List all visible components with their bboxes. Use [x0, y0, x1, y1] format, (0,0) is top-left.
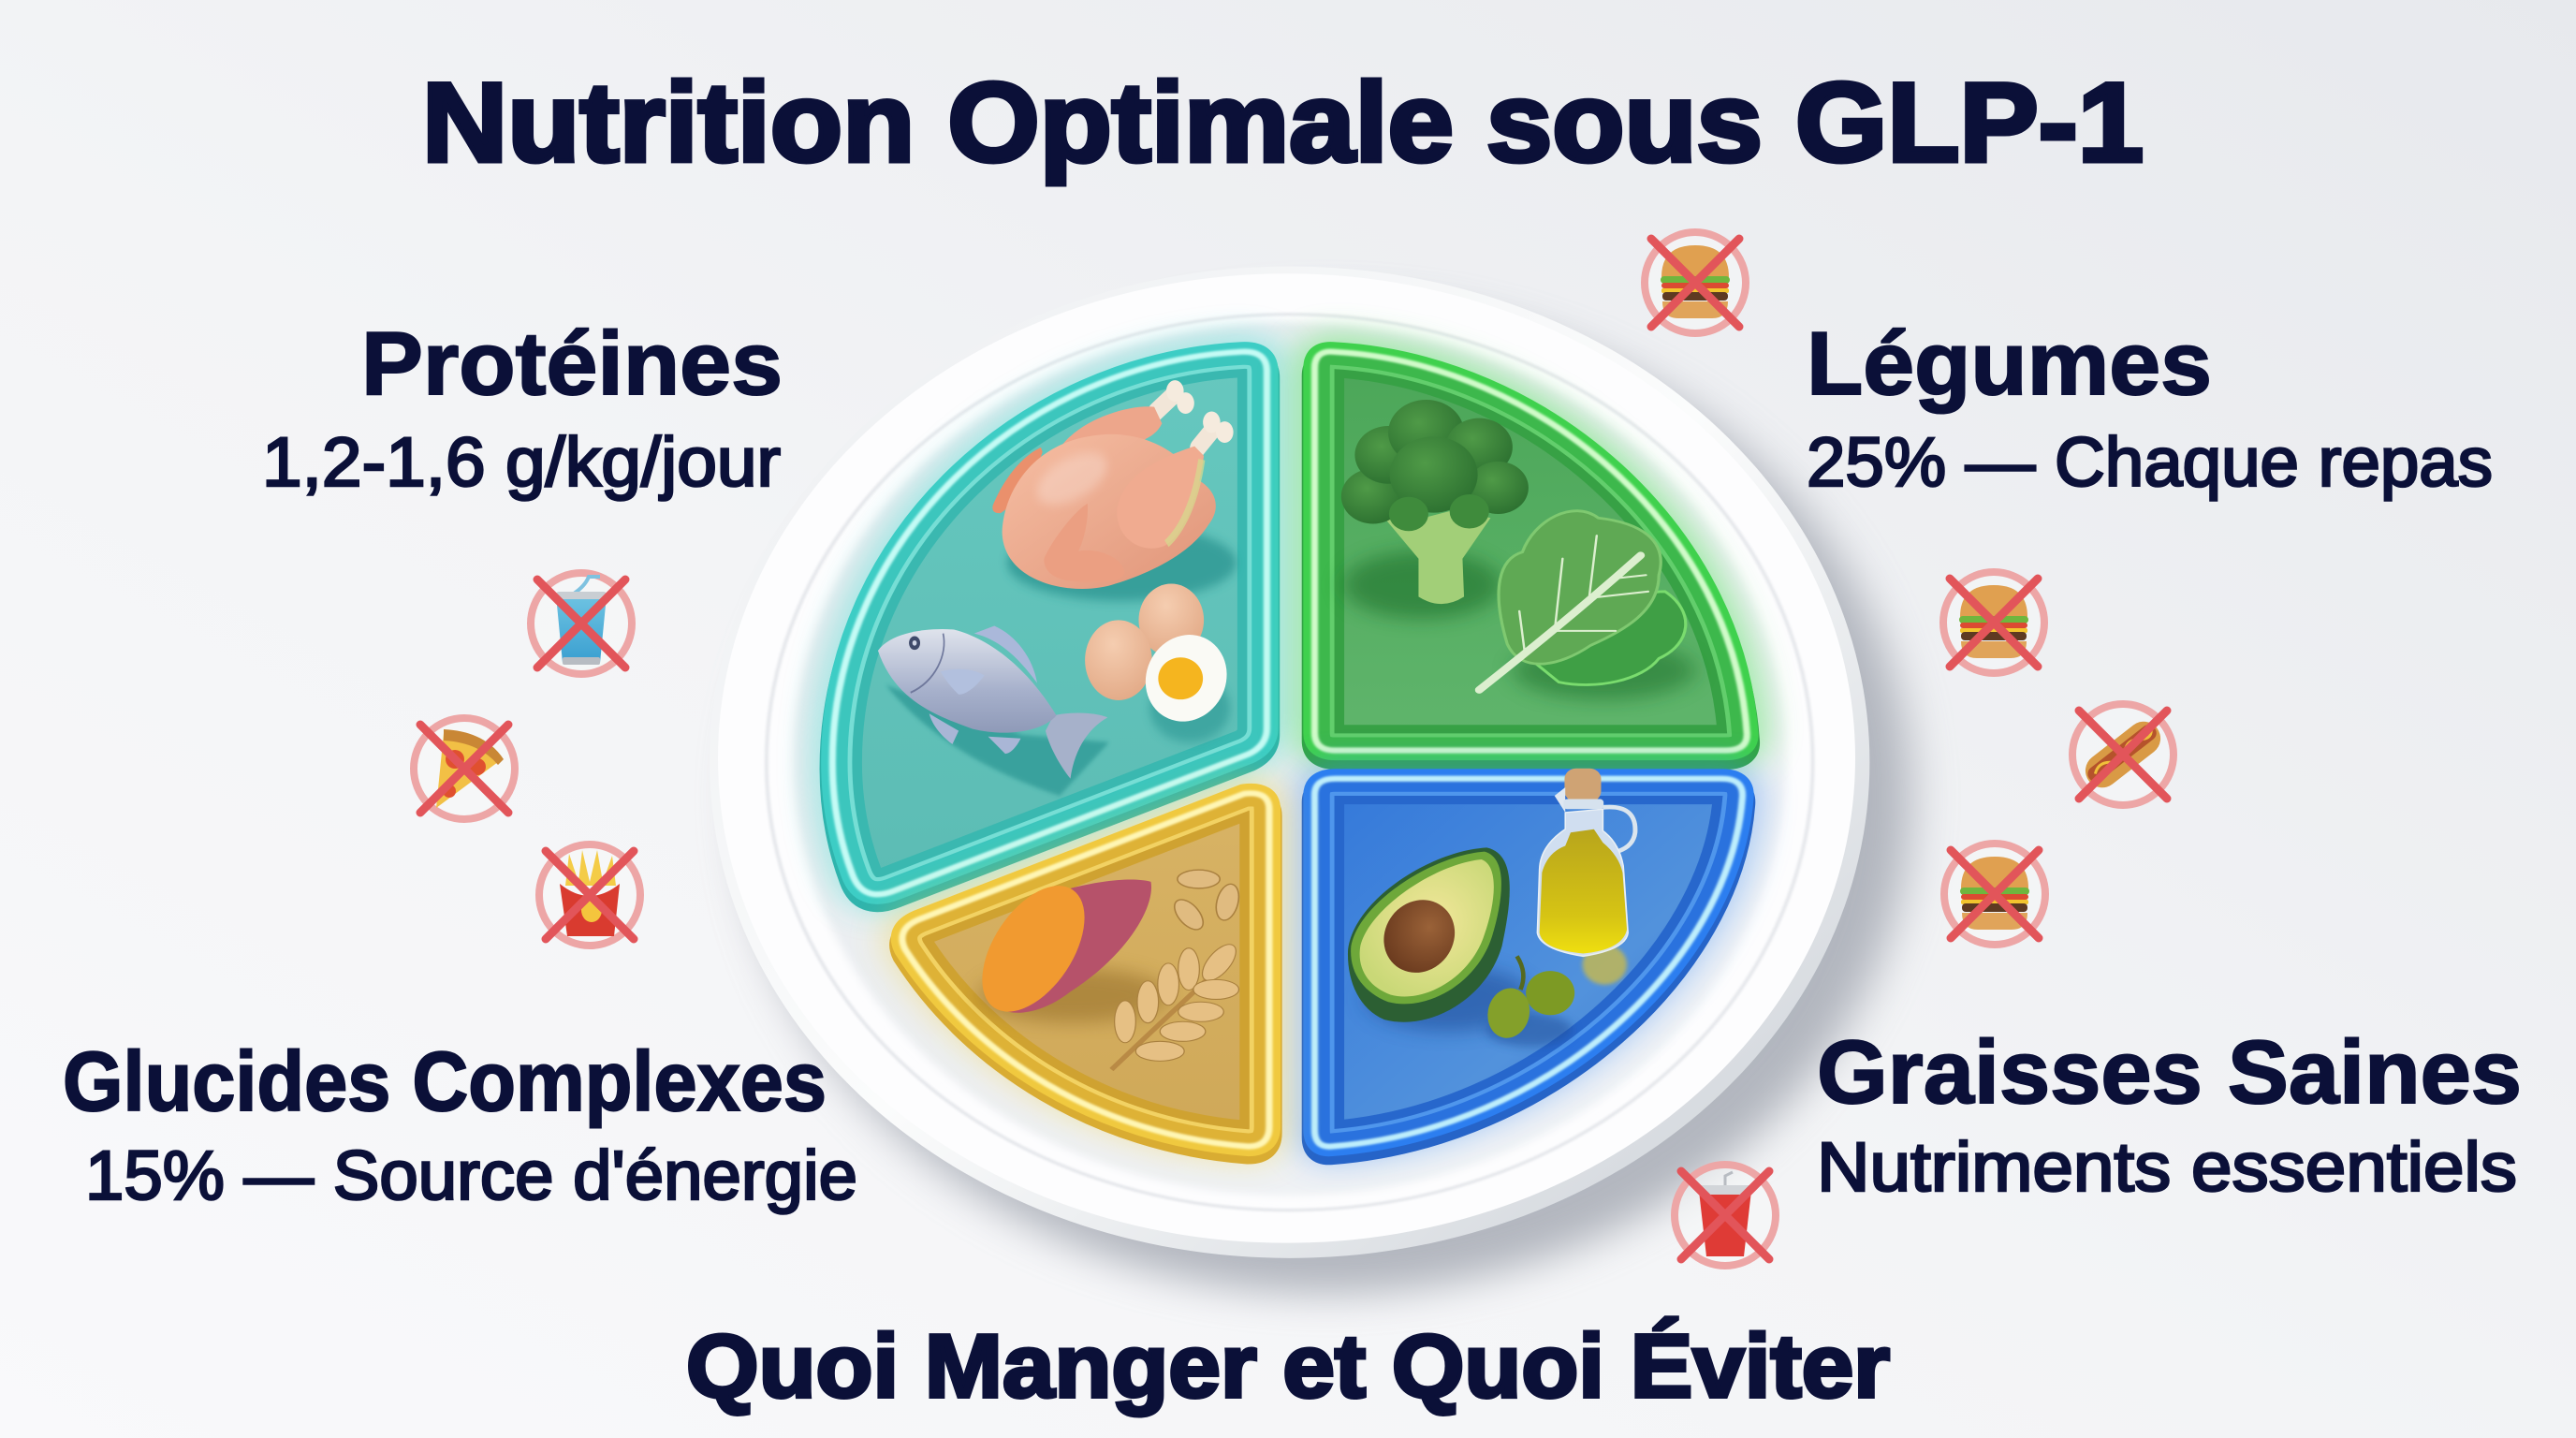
heading: Légumes: [1807, 314, 2493, 501]
icon: no burger right lower: [1944, 844, 2045, 945]
section: glucides complexes (yellow): [902, 793, 1269, 1153]
avocado: [1348, 847, 1532, 1032]
icon: no fries: [539, 844, 640, 946]
plate body: [710, 267, 1869, 1258]
icon: no hot dog: [2072, 704, 2174, 805]
plate shadow: [744, 302, 1911, 1294]
icon: no burger top: [1645, 232, 1746, 333]
broccoli: [1341, 400, 1529, 619]
heading: Glucides Complexes: Glucides Complexes: [63, 1035, 827, 1129]
chicken: [992, 380, 1237, 601]
eggs: [1085, 584, 1235, 742]
text: protéines dose: 1,2-1,6 g/kg/jour: [262, 423, 781, 501]
title: Nutrition Optimale sous GLP-1: [422, 60, 2144, 185]
text: glucides share: 15% — Source d'énergie: [85, 1137, 857, 1214]
heading: Graisses Saines: Graisses Saines: [1817, 1022, 2522, 1123]
heading: Protéines: [262, 314, 783, 501]
section: légumes (green): [1314, 352, 1747, 758]
text: graisses description: Nutriments essentiels: [1817, 1128, 2517, 1206]
text: légumes share: 25% — Chaque repas: [1807, 423, 2493, 501]
grains: [1169, 870, 1242, 934]
section: protéines (teal): [832, 352, 1266, 901]
icon: no red cup: [1675, 1165, 1776, 1266]
plate: [710, 267, 1911, 1294]
icon: no soda: [531, 573, 632, 674]
heading: Glucides Complexes: [63, 1035, 857, 1214]
spinach leaf: [1479, 511, 1695, 700]
sweet potato: [961, 872, 1168, 1026]
olive oil bottle: [1537, 769, 1635, 985]
icon: no pizza: [414, 718, 515, 819]
icon: no burger right upper: [1943, 572, 2044, 673]
section: graisses saines (blue): [1314, 779, 1743, 1153]
footer heading: Quoi Manger et Quoi Éviter: [686, 1316, 1890, 1416]
heading: Graisses Saines: [1817, 1022, 2522, 1206]
fish: [878, 625, 1109, 796]
heading: Légumes: Légumes: [1807, 314, 2212, 414]
olives: [1484, 956, 1574, 1047]
wheat: [1111, 940, 1242, 1069]
heading: Protéines: Protéines: [361, 314, 783, 414]
